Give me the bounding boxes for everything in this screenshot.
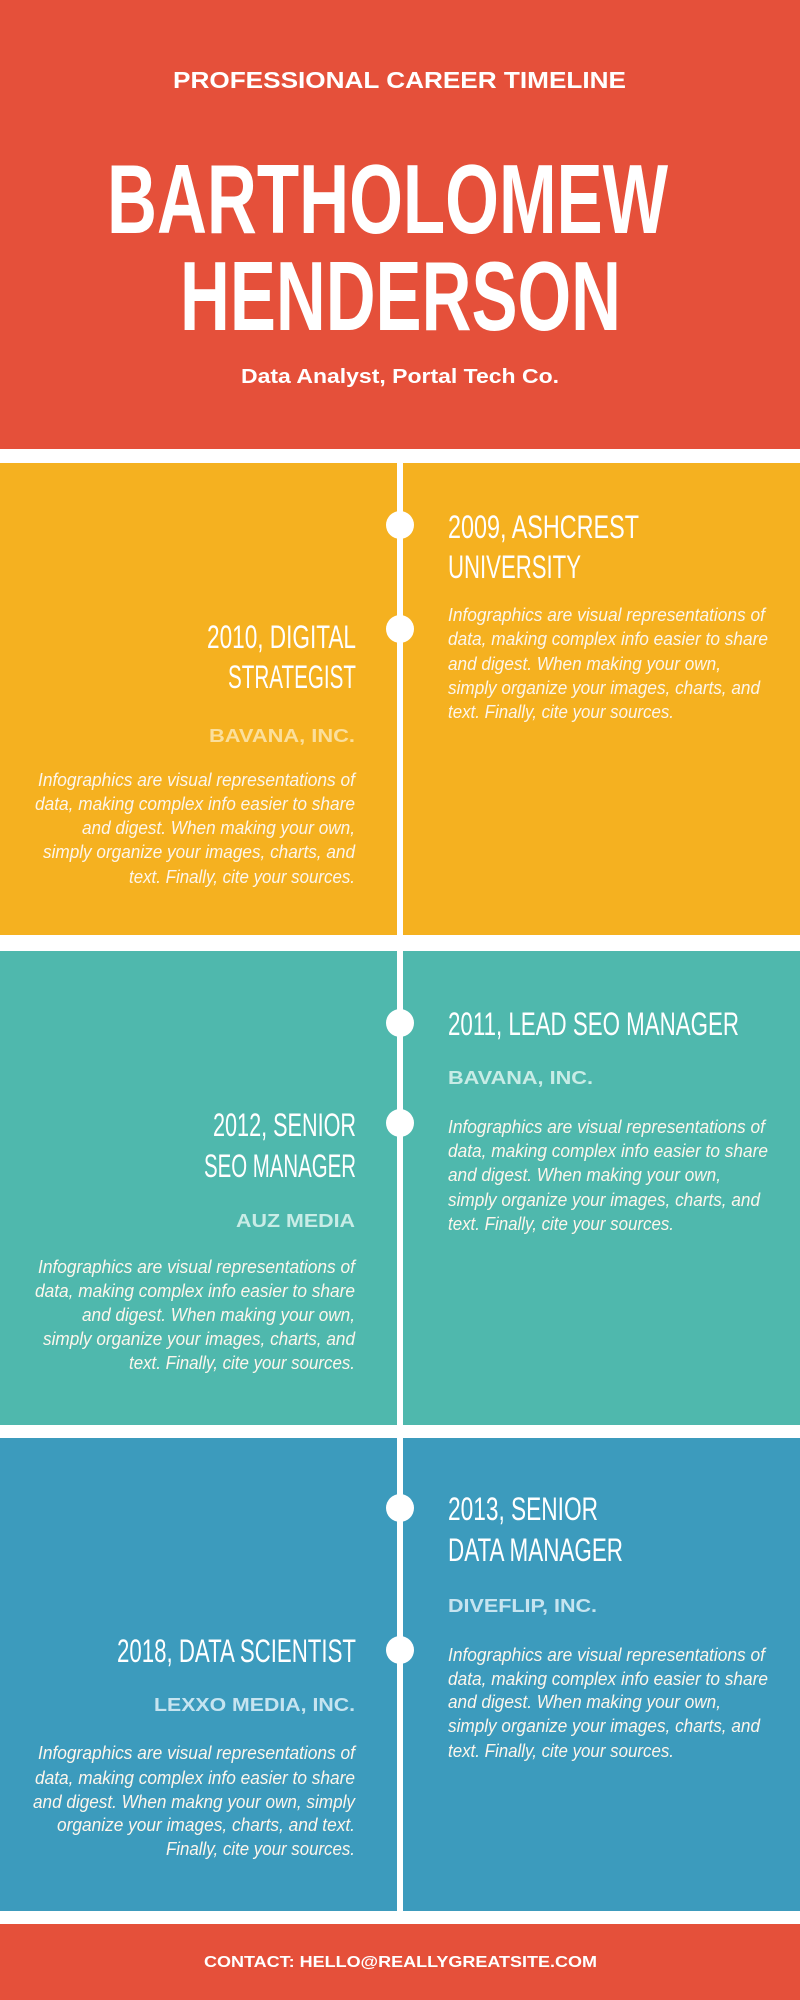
name title: HENDERSON bbox=[180, 241, 621, 351]
entry: 2010 Digital Strategist bbox=[35, 619, 357, 887]
entry: 2018 Data Scientist: Infographics are visual representations of bbox=[38, 1743, 357, 1763]
entry: 2009 Ashcrest University: text. Finally, cite your sources. bbox=[448, 702, 674, 722]
entry: 2013 Senior Data Manager bbox=[448, 1491, 768, 1761]
entry: 2009 Ashcrest University: and digest. When making your own, bbox=[448, 654, 721, 674]
entry: 2009 Ashcrest University: UNIVERSITY bbox=[448, 549, 581, 585]
entry: 2012 Senior SEO Manager: 2012, SENIOR bbox=[213, 1107, 356, 1143]
entry: 2018 Data Scientist: Finally, cite your sources. bbox=[166, 1839, 355, 1859]
entry: 2011 Lead SEO Manager bbox=[448, 1006, 768, 1234]
entry: 2010 Digital Strategist: BAVANA, INC. bbox=[209, 726, 355, 746]
entry: 2011 Lead SEO Manager: simply organize your images, charts, and bbox=[448, 1190, 761, 1210]
entry: 2013 Senior Data Manager: 2013, SENIOR bbox=[448, 1491, 598, 1527]
entry: 2010 Digital Strategist: 2010, DIGITAL bbox=[207, 619, 356, 655]
timeline dots bbox=[386, 1009, 414, 1137]
entry: 2009 Ashcrest University: Infographics are visual representations of bbox=[448, 605, 767, 625]
entry: 2010 Digital Strategist: data, making complex info easier to share bbox=[35, 794, 355, 814]
timeline dots bbox=[386, 1494, 414, 1664]
entry: 2018 Data Scientist: organize your images, charts, and text. bbox=[57, 1815, 355, 1835]
entry: 2012 Senior SEO Manager: simply organize your images, charts, and bbox=[43, 1329, 356, 1349]
entry: 2013 Senior Data Manager: and digest. When making your own, bbox=[448, 1692, 721, 1712]
entry: 2011 Lead SEO Manager: data, making complex info easier to share bbox=[448, 1141, 768, 1161]
entry: 2013 Senior Data Manager: DATA MANAGER bbox=[448, 1532, 623, 1568]
entry: 2009 Ashcrest University: data, making complex info easier to share bbox=[448, 629, 768, 649]
entry: 2009 Ashcrest University bbox=[448, 509, 768, 722]
job subtitle: Data Analyst, Portal Tech Co. bbox=[241, 366, 559, 388]
entry: 2012 Senior SEO Manager: data, making complex info easier to share bbox=[35, 1281, 355, 1301]
entry: 2010 Digital Strategist: STRATEGIST bbox=[228, 659, 356, 695]
entry: 2009 Ashcrest University: 2009, ASHCREST bbox=[448, 509, 639, 545]
entry: 2012 Senior SEO Manager: AUZ MEDIA bbox=[236, 1211, 355, 1231]
panel: teal section bbox=[0, 951, 800, 1425]
name title bbox=[107, 144, 668, 351]
header subtitle: professional career timeline: PROFESSIONAL CAREER TIMELINE bbox=[173, 67, 626, 93]
entry: 2010 Digital Strategist: Infographics are visual representations of bbox=[38, 770, 357, 790]
footer contact text: CONTACT: HELLO@REALLYGREATSITE.COM bbox=[204, 1954, 597, 1971]
entry: 2018 Data Scientist: LEXXO MEDIA, INC. bbox=[154, 1695, 355, 1715]
entry: 2010 Digital Strategist: simply organize your images, charts, and bbox=[43, 842, 356, 862]
entry: 2013 Senior Data Manager: text. Finally, cite your sources. bbox=[448, 1741, 674, 1761]
entry: 2018 Data Scientist: data, making complex info easier to share bbox=[35, 1768, 355, 1788]
entry: 2012 Senior SEO Manager: SEO MANAGER bbox=[204, 1148, 356, 1184]
entry: 2018 Data Scientist: and digest. When makng your own, simply bbox=[33, 1792, 356, 1812]
entry: 2012 Senior SEO Manager: and digest. When making your own, bbox=[82, 1305, 355, 1325]
entry: 2018 Data Scientist: 2018, DATA SCIENTIST bbox=[117, 1633, 356, 1669]
entry: 2013 Senior Data Manager: data, making complex info easier to share bbox=[448, 1669, 768, 1689]
entry: 2011 Lead SEO Manager: Infographics are visual representations of bbox=[448, 1117, 767, 1137]
entry: 2013 Senior Data Manager: simply organize your images, charts, and bbox=[448, 1716, 761, 1736]
header panel bbox=[0, 0, 800, 449]
entry: 2010 Digital Strategist: and digest. When making your own, bbox=[82, 818, 355, 838]
entry: 2011 Lead SEO Manager: text. Finally, cite your sources. bbox=[448, 1214, 674, 1234]
entry: 2012 Senior SEO Manager bbox=[35, 1107, 357, 1373]
panel: blue section bbox=[0, 1438, 800, 1911]
panel: yellow section bbox=[0, 463, 800, 935]
entry: 2011 Lead SEO Manager: BAVANA, INC. bbox=[448, 1068, 593, 1088]
timeline dots bbox=[386, 511, 414, 643]
entry: 2013 Senior Data Manager: Infographics are visual representations of bbox=[448, 1645, 767, 1665]
footer bbox=[0, 1924, 800, 2000]
entry: 2010 Digital Strategist: text. Finally, cite your sources. bbox=[129, 867, 355, 887]
entry: 2009 Ashcrest University: simply organize your images, charts, and bbox=[448, 678, 761, 698]
entry: 2012 Senior SEO Manager: Infographics are visual representations of bbox=[38, 1257, 357, 1277]
entry: 2018 Data Scientist bbox=[33, 1633, 357, 1859]
entry: 2013 Senior Data Manager: DIVEFLIP, INC. bbox=[448, 1596, 597, 1616]
entry: 2012 Senior SEO Manager: text. Finally, cite your sources. bbox=[129, 1353, 355, 1373]
entry: 2011 Lead SEO Manager: and digest. When making your own, bbox=[448, 1165, 721, 1185]
